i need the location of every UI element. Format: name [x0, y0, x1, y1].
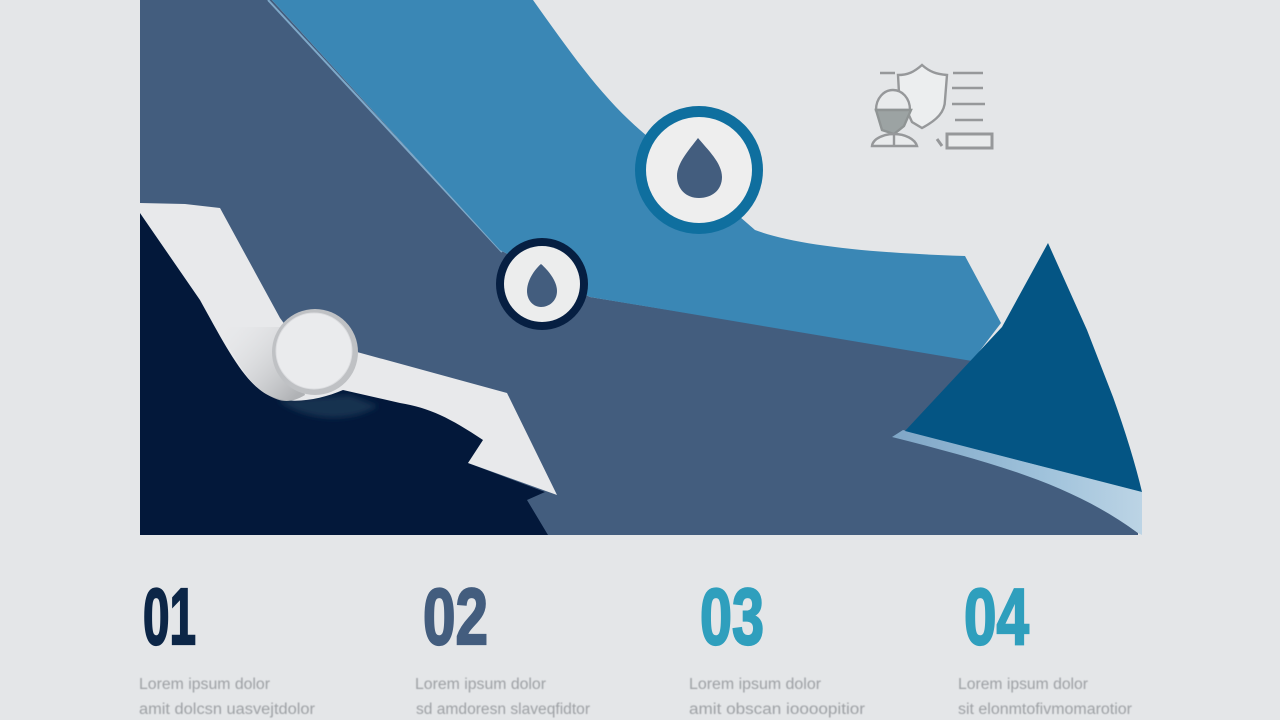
text 02: sd amdoresn slaveqfidtor [416, 701, 590, 718]
text 04: sit elonmtofivmomarotior [958, 701, 1132, 718]
marker circle: large with drop [635, 106, 763, 234]
number 04: 04 [964, 572, 1029, 661]
white arrow [140, 203, 557, 495]
arrow fold shadow [218, 327, 305, 401]
light blue band [892, 430, 1142, 535]
text 03: amit obscan ioooopitior [689, 701, 865, 718]
icon small mark [937, 139, 942, 146]
text 02 [415, 676, 590, 718]
icon battery [947, 134, 992, 148]
column 02 [415, 572, 590, 718]
text 01 [139, 676, 315, 718]
icon head [876, 90, 910, 110]
column 03 [689, 572, 865, 718]
icon base [872, 134, 917, 146]
navy layer [140, 213, 548, 535]
navy layer highlight [278, 395, 378, 418]
text 04 [958, 676, 1132, 718]
text 04: Lorem ipsum dolor [958, 676, 1088, 693]
arrow body [140, 203, 557, 495]
icon funnel [876, 110, 911, 134]
text 01: amit dolcsn uasvejtdolor [139, 701, 315, 718]
text 03 [689, 676, 865, 718]
text 03: Lorem ipsum dolor [689, 676, 821, 693]
number 02: 02 [423, 572, 488, 661]
number 03: 03 [700, 572, 764, 661]
icon: shield and flask outline [872, 65, 992, 148]
column 04 [958, 572, 1132, 718]
icon shield [898, 65, 947, 128]
icon: large water drop [677, 138, 722, 198]
column 01 [139, 572, 315, 718]
slate layer [140, 0, 1138, 535]
panel: layered chart [140, 0, 1142, 535]
number 01: 01 [143, 572, 196, 661]
dark blue triangle arrow [905, 243, 1142, 492]
text 02: Lorem ipsum dolor [415, 676, 546, 693]
icon: small water drop [527, 264, 557, 307]
light edge of blue layer [268, 0, 502, 252]
marker circle: small with drop [496, 238, 588, 330]
blue layer [272, 0, 1001, 361]
text 01: Lorem ipsum dolor [139, 676, 270, 693]
icon lines [880, 73, 985, 120]
marker circle: white [272, 309, 358, 395]
